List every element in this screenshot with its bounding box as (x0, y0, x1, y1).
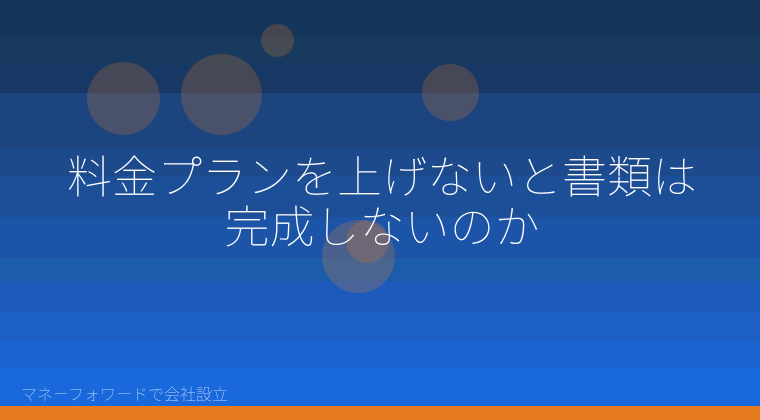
circle: small top (261, 24, 294, 57)
circle: right (422, 64, 479, 121)
title: 料金プランを上げないと書類は (67, 152, 697, 203)
footer label: マネーフォワードで会社設立 (21, 387, 228, 404)
title (67, 152, 697, 253)
circle: small lower (346, 220, 389, 263)
title: 完成しないのか (224, 202, 540, 253)
circle: large lower (322, 220, 395, 293)
circle: left (87, 62, 160, 135)
circle: centre-left (181, 54, 262, 135)
orange bottom bar (0, 406, 760, 420)
